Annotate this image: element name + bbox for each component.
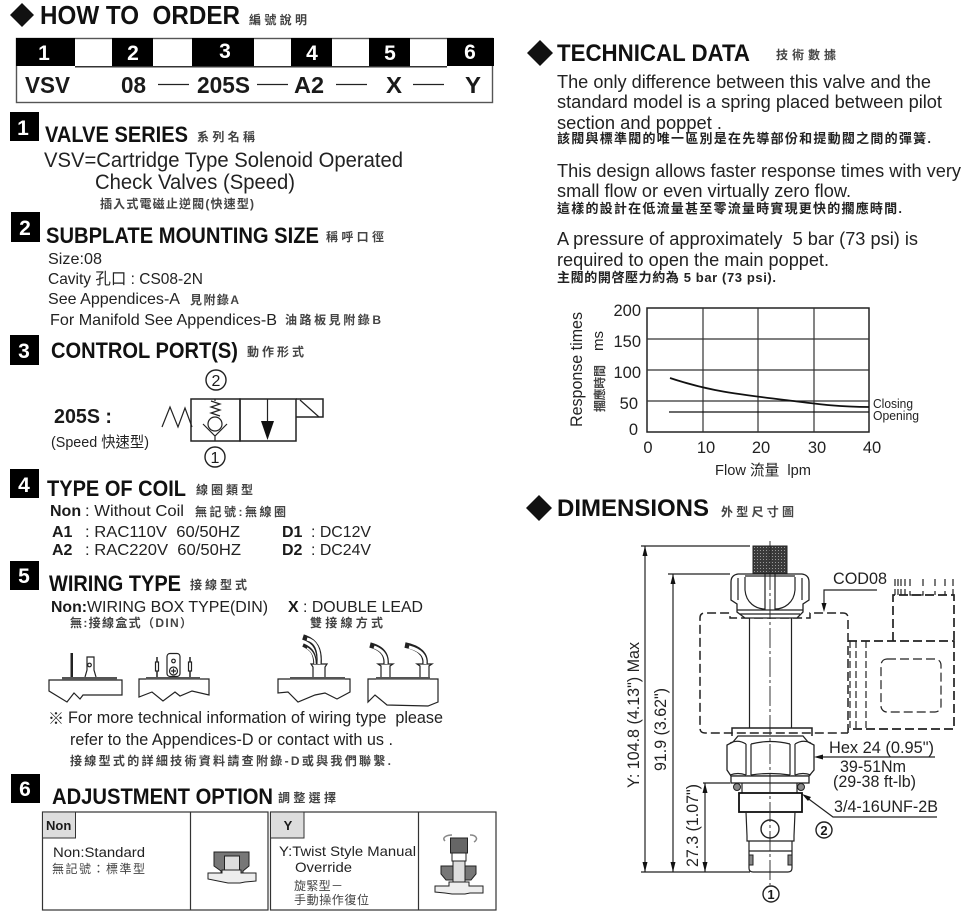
option panel: Y: 手動操作復位 bbox=[294, 892, 369, 907]
description: valve series: Check Valves (Speed) bbox=[95, 171, 295, 194]
port marker 1: 1 bbox=[767, 887, 775, 902]
icon: standard cap bbox=[208, 852, 256, 883]
cartridge lower body bbox=[734, 783, 804, 872]
description: size and cavity: 油路板見附錄B bbox=[285, 312, 381, 327]
heading: adjustment option: ADJUSTMENT OPTION bbox=[52, 784, 273, 809]
number badge 1 bbox=[10, 112, 39, 141]
heading: how to order: HOW TO ORDER bbox=[40, 0, 240, 30]
callout: thread size: 3/4-16UNF-2B bbox=[834, 798, 938, 816]
x axis labels: 20 bbox=[752, 439, 770, 457]
paragraph: difference: standard model is a spring placed between pilot bbox=[557, 92, 942, 112]
legend: opening: Opening bbox=[873, 408, 919, 423]
wiring options: Non: bbox=[51, 599, 87, 616]
paragraph: difference: section and poppet . bbox=[557, 113, 722, 133]
y axis labels: 100 bbox=[613, 364, 641, 382]
heading chinese: control port: 動作形式 bbox=[247, 344, 304, 359]
coil options: : DC12V bbox=[311, 524, 371, 541]
description: size and cavity: Cavity 孔口 : CS08-2N bbox=[48, 270, 203, 288]
paragraph: pressure: A pressure of approximately 5 bar (73 psi) is bbox=[557, 229, 918, 249]
label: speed: (Speed 快速型) bbox=[51, 434, 149, 451]
section 5: wiring type bbox=[10, 561, 443, 768]
coil options: Non bbox=[50, 503, 81, 520]
valve hydraulic symbol bbox=[162, 370, 323, 467]
section: technical data bbox=[527, 40, 961, 285]
note: wiring technical information: 接線型式的詳細技術資料請查附錄-D或與我們聯繫. bbox=[70, 753, 391, 768]
icon: DIN wiring box b bbox=[139, 654, 209, 701]
curve: closing bbox=[670, 378, 869, 407]
coil options: : RAC110V 60/50HZ bbox=[85, 524, 240, 541]
heading: dimensions: DIMENSIONS bbox=[557, 495, 709, 522]
option panel: Y: Y:Twist Style Manual bbox=[279, 843, 416, 859]
coil options: A2 bbox=[52, 542, 73, 559]
paragraph: design: 這樣的設計在低流量甚至零流量時實現更快的擱應時間. bbox=[557, 201, 902, 216]
stem bbox=[750, 618, 792, 728]
number badge 5: 5 bbox=[18, 565, 30, 588]
callout: COD08: COD08 bbox=[833, 570, 887, 588]
x axis labels: 30 bbox=[808, 439, 826, 457]
label: 205S: 205S : bbox=[54, 406, 112, 428]
order code table: VSV bbox=[25, 72, 71, 98]
nut bbox=[731, 574, 809, 618]
order code table: 08 bbox=[121, 72, 146, 98]
number badge 2 bbox=[11, 212, 40, 242]
icon: diamond bullet bbox=[527, 40, 553, 66]
number badge 3 bbox=[10, 335, 39, 365]
number badge 3: 3 bbox=[18, 340, 30, 363]
description: valve series: 插入式電磁止逆閥(快速型) bbox=[100, 196, 254, 211]
paragraph: pressure bbox=[557, 229, 918, 285]
section 1: valve series bbox=[10, 112, 403, 211]
wiring options: 無:接線盒式（DIN） bbox=[70, 615, 192, 630]
heading: valve series: VALVE SERIES bbox=[45, 122, 188, 147]
option panel: non: Non bbox=[46, 818, 71, 833]
option panel: non: 無記號：標準型 bbox=[52, 861, 145, 876]
port marker 2 bbox=[816, 822, 832, 838]
coil options: : DC24V bbox=[311, 542, 371, 559]
option panel: Y: 旋緊型－ bbox=[294, 879, 343, 893]
icon: DIN wiring box a bbox=[49, 653, 122, 702]
icon: diamond bullet bbox=[526, 495, 552, 521]
icon: double lead a bbox=[278, 637, 350, 702]
note: wiring technical information: ※ bbox=[48, 711, 64, 728]
heading chinese: technical data: 技術數據 bbox=[776, 47, 836, 62]
heading chinese: dimensions: 外型尺寸圖 bbox=[721, 504, 794, 519]
order code table: 1 bbox=[38, 42, 50, 65]
number badge 4: 4 bbox=[18, 474, 30, 497]
wiring options: WIRING BOX TYPE(DIN) bbox=[87, 599, 268, 616]
heading chinese: adjustment option: 調整選擇 bbox=[278, 790, 336, 805]
wiring options: : DOUBLE LEAD bbox=[303, 599, 423, 616]
order code table: A2 bbox=[294, 72, 324, 98]
option panel: Y bbox=[270, 812, 496, 910]
description: valve series: VSV=Cartridge Type Solenoid Operated bbox=[44, 149, 403, 172]
center line bbox=[769, 541, 771, 885]
number badge 4 bbox=[10, 469, 39, 498]
order code table bbox=[16, 38, 494, 102]
order code table: X bbox=[386, 72, 403, 98]
section 6: adjustment option bbox=[11, 774, 496, 910]
coil options: : Without Coil bbox=[85, 503, 184, 520]
option panel: non: Non:Standard bbox=[53, 845, 145, 860]
section: dimensions heading bbox=[526, 495, 794, 522]
paragraph: pressure: required to open the main poppet. bbox=[557, 250, 829, 270]
port marker 1 bbox=[763, 886, 779, 902]
line chart: response times vs flow bbox=[568, 302, 919, 479]
icon: double lead b bbox=[368, 645, 438, 706]
coil options: D1 bbox=[282, 524, 303, 541]
heading: control port: CONTROL PORT(S) bbox=[51, 338, 238, 363]
heading chinese: subplate mounting size: 稱呼口徑 bbox=[326, 229, 384, 244]
number badge 2: 2 bbox=[19, 217, 31, 240]
number badge 6: 6 bbox=[19, 778, 31, 801]
number badge 5 bbox=[10, 561, 39, 590]
heading: technical data: TECHNICAL DATA bbox=[557, 40, 750, 67]
coil outline dashed bbox=[700, 579, 954, 733]
dimension drawing: valve bbox=[625, 541, 954, 902]
heading chinese: wiring type: 接線型式 bbox=[190, 577, 247, 592]
dimension label: 91.9: 91.9 (3.62") bbox=[652, 688, 670, 771]
coil options: 無記號:無線圈 bbox=[195, 504, 286, 519]
dimension label: 104.8: Y: 104.8 (4.13") Max bbox=[625, 641, 643, 788]
x axis labels: 10 bbox=[697, 439, 715, 457]
curve: opening bbox=[669, 411, 869, 413]
wiring options: X bbox=[288, 599, 299, 616]
dimension lines and arrows bbox=[641, 546, 750, 872]
paragraph: design: This design allows faster response times with very bbox=[557, 161, 961, 181]
heading: type of coil: TYPE OF COIL bbox=[47, 476, 186, 501]
callout: thread size bbox=[802, 794, 938, 817]
y axis title chinese: 擱應時間 bbox=[592, 365, 607, 412]
description: size and cavity: 見附錄A bbox=[190, 292, 239, 307]
heading chinese: how to order: 編號說明 bbox=[249, 12, 307, 27]
note: wiring technical information: refer to the Appendices-D or contact with us . bbox=[70, 730, 393, 749]
heading chinese: valve series: 系列名稱 bbox=[197, 129, 255, 144]
order code table: 2 bbox=[127, 42, 139, 65]
icon: diamond bullet bbox=[10, 3, 34, 27]
note: wiring technical information: For more technical information of wiring type please bbox=[68, 708, 443, 727]
y axis title: Response times bbox=[568, 312, 586, 427]
wiring options bbox=[51, 599, 423, 630]
section: how to order bbox=[10, 0, 494, 102]
coil options: D2 bbox=[282, 542, 303, 559]
coil options: A1 bbox=[52, 524, 73, 541]
section 4: type of coil bbox=[10, 469, 371, 559]
y axis labels bbox=[613, 302, 641, 439]
paragraph: design: small flow or even virtually zero flow. bbox=[557, 181, 851, 201]
paragraph: difference: The only difference between this valve and the bbox=[557, 72, 931, 92]
order code table: 6 bbox=[464, 41, 476, 64]
port marker 2: 2 bbox=[820, 823, 828, 838]
valve hydraulic symbol: 2 bbox=[212, 373, 221, 390]
x axis title: Flow 流量 lpm bbox=[715, 462, 811, 479]
x axis labels: 0 bbox=[643, 439, 653, 457]
y axis unit: ms bbox=[590, 331, 607, 351]
paragraph: difference: 該閥與標準閥的唯一區別是在先導部份和提動閥之間的彈簧. bbox=[557, 131, 931, 146]
paragraph: difference bbox=[557, 72, 942, 146]
icon: twist override bbox=[435, 835, 483, 894]
y axis labels: 0 bbox=[629, 421, 638, 439]
hex body bbox=[727, 728, 814, 783]
callout: hex 24: Hex 24 (0.95") bbox=[829, 739, 934, 757]
callout: hex 24: 39-51Nm bbox=[840, 758, 906, 776]
number badge 1: 1 bbox=[17, 117, 29, 140]
option panel: Y: Y bbox=[284, 818, 293, 833]
order code table: Y bbox=[465, 72, 481, 98]
x axis labels bbox=[643, 439, 881, 457]
legend: closing: Closing bbox=[873, 396, 913, 411]
valve hydraulic symbol: 1 bbox=[211, 450, 220, 467]
number badge 6 bbox=[11, 774, 40, 803]
y axis labels: 50 bbox=[620, 395, 638, 413]
order code table: 205S bbox=[197, 72, 250, 98]
option panel: non bbox=[42, 812, 268, 910]
x axis labels: 40 bbox=[863, 439, 881, 457]
y axis labels: 200 bbox=[613, 302, 641, 320]
wiring options: 雙接線方式 bbox=[310, 615, 383, 630]
y axis labels: 150 bbox=[613, 333, 641, 351]
option panel: Y: Override bbox=[295, 859, 352, 875]
heading chinese: type of coil: 線圈類型 bbox=[196, 482, 253, 497]
order code table: 5 bbox=[384, 42, 396, 65]
paragraph: pressure: 主閥的開啓壓力約為 5 bar (73 psi). bbox=[557, 270, 776, 285]
description: valve series bbox=[44, 149, 403, 211]
callout: hex 24 bbox=[814, 739, 935, 791]
description: size and cavity: Size:08 bbox=[48, 251, 102, 268]
order code table: 3 bbox=[219, 40, 231, 63]
knurled knob bbox=[753, 546, 787, 574]
note: wiring technical information bbox=[48, 708, 443, 768]
callout: COD08 bbox=[822, 570, 887, 612]
dimension label: 27.3: 27.3 (1.07") bbox=[684, 784, 702, 867]
coil options: : RAC220V 60/50HZ bbox=[85, 542, 241, 559]
section 2: subplate mounting size bbox=[11, 212, 384, 329]
order code table: 4 bbox=[306, 42, 318, 65]
description: size and cavity: See Appendices-A bbox=[48, 291, 180, 308]
description: size and cavity bbox=[48, 251, 381, 329]
callout: hex 24: (29-38 ft-lb) bbox=[833, 773, 916, 791]
section 3: control port bbox=[10, 335, 323, 467]
coil options bbox=[50, 503, 371, 559]
paragraph: design bbox=[557, 161, 961, 216]
heading: subplate mounting size: SUBPLATE MOUNTING SIZE bbox=[46, 223, 319, 248]
description: size and cavity: For Manifold See Appendices-B bbox=[50, 312, 277, 329]
heading: wiring type: WIRING TYPE bbox=[49, 571, 181, 596]
